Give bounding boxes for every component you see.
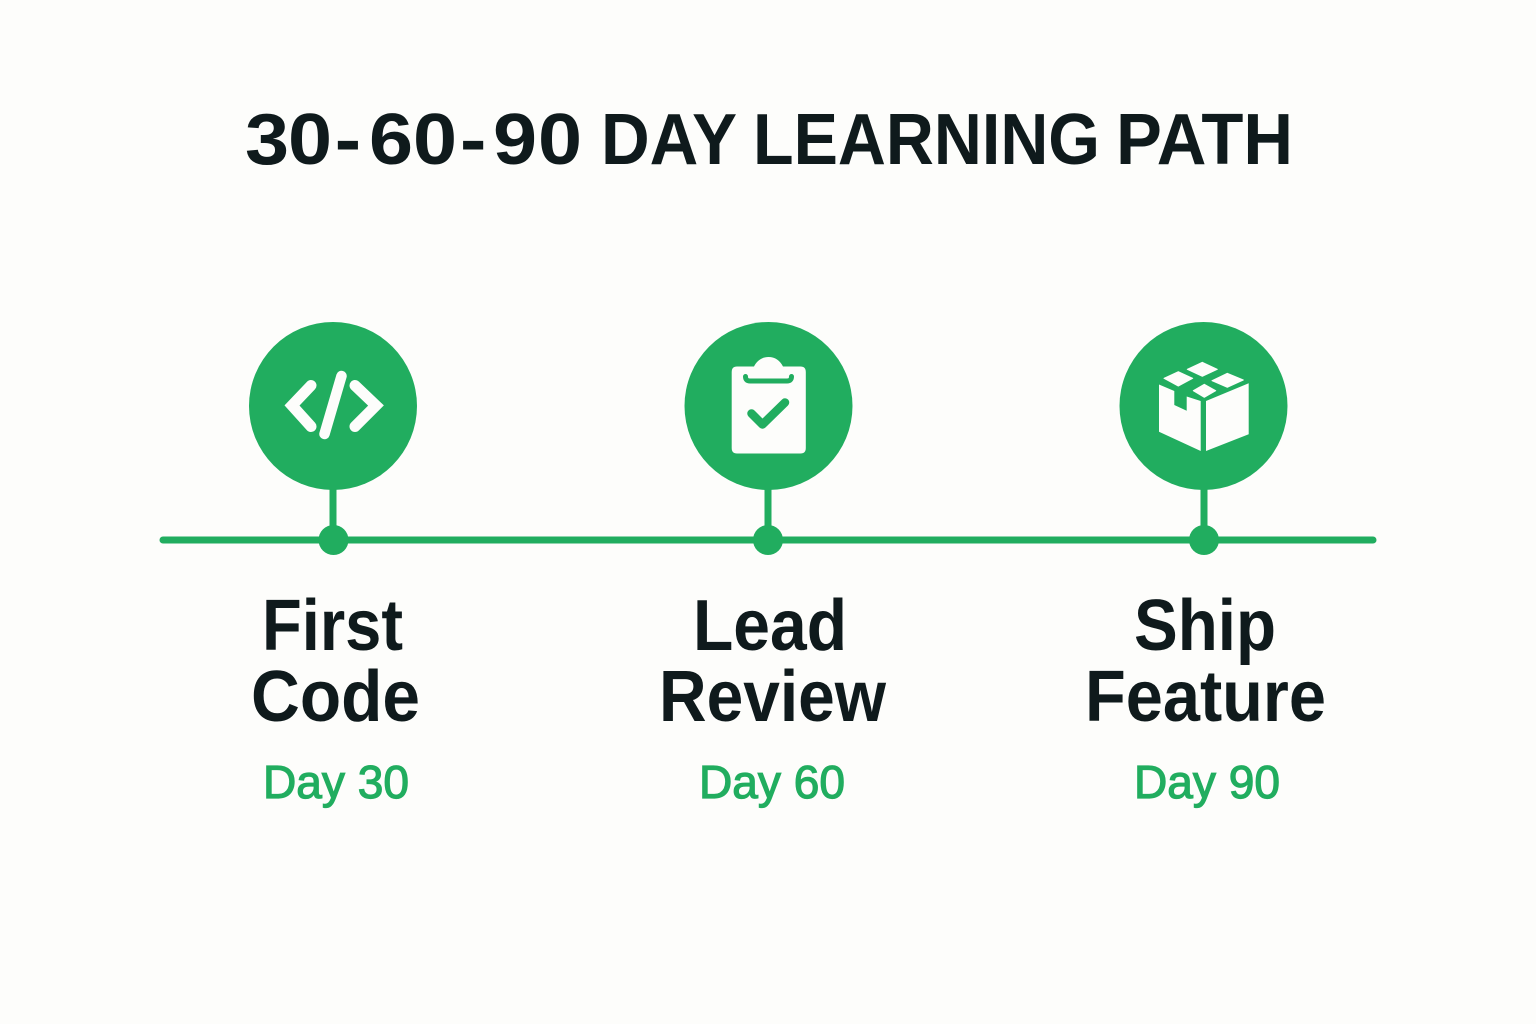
label: first code: Code [251, 657, 420, 737]
label: lead review [659, 586, 887, 737]
title: DAY [601, 100, 737, 180]
connector stem [764, 485, 772, 530]
timeline dot [753, 525, 783, 555]
title: LEARNING [753, 100, 1100, 180]
label: lead review: Review [659, 657, 887, 737]
day label: day 60: Day 60 [699, 756, 845, 808]
icon circle: package box [1120, 322, 1288, 490]
label: ship feature: Ship [1134, 586, 1276, 666]
label: ship feature [1085, 586, 1326, 737]
timeline dot [318, 525, 348, 555]
icon circle: clipboard [684, 322, 852, 490]
day label: day 30: Day 30 [263, 756, 409, 808]
timeline axis [163, 536, 1373, 544]
day label: day 90: Day 90 [1134, 756, 1280, 808]
timeline dot [1189, 525, 1219, 555]
connector stem [1200, 485, 1208, 530]
milestone: ship feature [1085, 322, 1326, 808]
icon circle: code [249, 322, 417, 490]
label: first code: First [262, 586, 403, 666]
label: first code [251, 586, 420, 737]
label: lead review: Lead [693, 586, 847, 666]
title: 30-60-90 [245, 99, 582, 180]
label: ship feature: Feature [1085, 657, 1326, 737]
milestone: lead review [659, 322, 887, 808]
milestone: first code [249, 322, 420, 808]
title: PATH [1116, 100, 1293, 180]
title [245, 99, 1293, 180]
connector stem [330, 485, 336, 530]
